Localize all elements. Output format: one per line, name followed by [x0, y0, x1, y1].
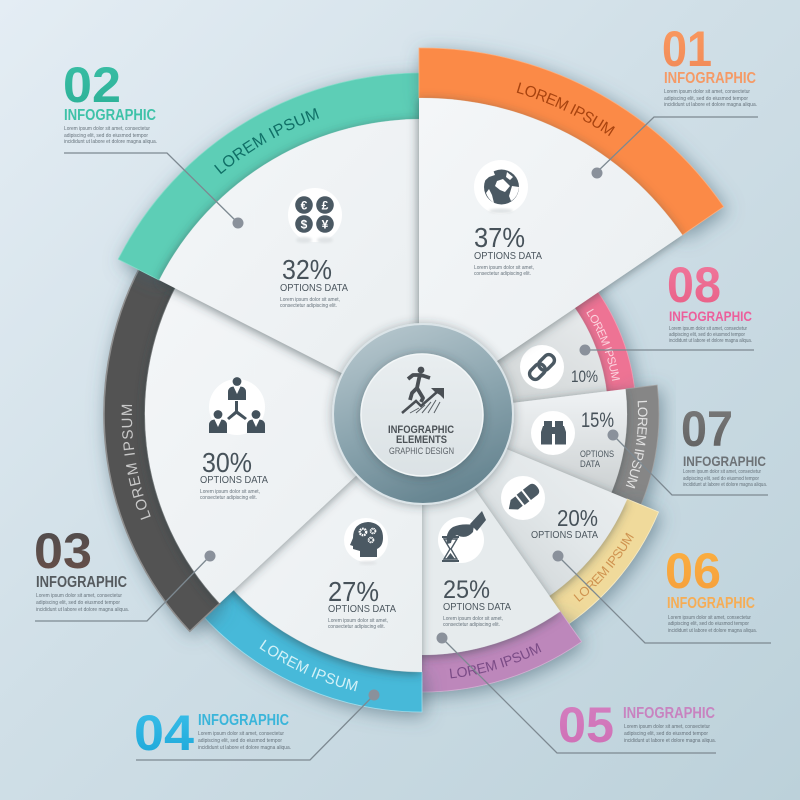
caption options data: OPTIONS — [580, 449, 614, 460]
label 04: incididunt ut labore et dolore magna aliqua. — [198, 745, 291, 751]
label 02: Lorem ipsum dolor sit amet, consectetur — [64, 126, 150, 132]
label 02: incididunt ut labore et dolore magna aliqua. — [64, 139, 157, 145]
icon: binoculars — [531, 411, 575, 455]
panel: segment 05 — [422, 486, 590, 706]
label 03: adipiscing elit, sed do eiusmod tempor — [36, 600, 120, 606]
caption options data: OPTIONS DATA — [280, 282, 348, 294]
band 03 — [104, 255, 220, 631]
label 07: INFOGRAPHIC — [683, 453, 766, 469]
caption options data: OPTIONS DATA — [443, 601, 511, 613]
band label 06: LOREM IPSUM — [574, 532, 634, 602]
hub ring — [333, 324, 513, 504]
label 06: adipiscing elit, sed do eiusmod tempor — [668, 621, 749, 627]
value 15%: 15% — [581, 409, 614, 432]
icon: hand and hourglass — [438, 511, 486, 563]
label 07: 07 — [681, 401, 733, 457]
label 05: INFOGRAPHIC — [623, 705, 715, 722]
body text — [280, 297, 340, 309]
band label 07: LOREM IPSUM — [626, 400, 648, 488]
body text: consectetur adipiscing elit. — [200, 495, 257, 501]
wedge 06 — [422, 414, 627, 606]
band 04 — [187, 573, 422, 712]
label 06: INFOGRAPHIC — [667, 595, 755, 612]
caption options data: OPTIONS DATA — [328, 603, 396, 615]
label 04: adipiscing elit, sed do eiusmod tempor — [198, 738, 282, 744]
label 08: INFOGRAPHIC — [669, 308, 752, 324]
value 30%: 30% — [202, 447, 252, 478]
caption options data: OPTIONS DATA — [200, 474, 268, 486]
band label 08: LOREM IPSUM — [586, 308, 620, 381]
label 08: Lorem ipsum dolor sit amet, consectetur — [669, 326, 747, 332]
body text — [200, 489, 260, 501]
icon: currency coins: £ — [322, 198, 329, 212]
label 08: adipiscing elit, sed do eiusmod tempor — [669, 332, 745, 338]
icon: head with gears — [344, 518, 388, 565]
body text — [474, 265, 534, 277]
panel: segment 03 — [96, 268, 361, 641]
value 10%: 10% — [571, 367, 598, 386]
label 06: Lorem ipsum dolor sit amet, consectetur — [668, 615, 751, 621]
band label 05: LOREM IPSUM — [450, 643, 542, 678]
body text: Lorem ipsum dolor sit amet, — [200, 489, 260, 495]
leader 03 — [35, 550, 216, 621]
label 01: Lorem ipsum dolor sit amet, consectetur — [664, 89, 750, 95]
hub title: ELEMENTS — [396, 434, 447, 446]
label 01: adipiscing elit, sed do eiusmod tempor — [664, 96, 748, 102]
band 07 — [603, 385, 659, 525]
icon: currency coins: € — [301, 198, 308, 212]
band 08 — [564, 276, 636, 408]
panel: segment 08 — [500, 288, 646, 402]
wedge 05 — [401, 414, 560, 655]
label 05 — [558, 697, 716, 753]
label 01 — [662, 21, 757, 108]
label 07 — [681, 401, 767, 488]
leader 01 — [592, 117, 758, 178]
leader 06 — [552, 550, 771, 643]
panel: segment 01 — [410, 42, 732, 367]
wedge 01 — [419, 98, 682, 414]
label 02 — [63, 57, 157, 145]
label 04: 04 — [134, 705, 194, 761]
icon: people network — [209, 377, 265, 435]
body text: consectetur adipiscing elit. — [474, 271, 531, 277]
value 37%: 37% — [474, 222, 525, 253]
wedge 08 — [422, 294, 608, 414]
body text: Lorem ipsum dolor sit amet, — [328, 618, 388, 624]
panel: segment 07 — [507, 380, 672, 510]
icon: currency coins — [288, 188, 342, 243]
label 02: 02 — [63, 57, 121, 113]
icon: link — [520, 345, 564, 389]
label 07: Lorem ipsum dolor sit amet, consectetur — [683, 469, 761, 475]
leader 04 — [136, 690, 380, 760]
label 04 — [134, 705, 291, 761]
value 20%: 20% — [557, 505, 598, 531]
caption options data: OPTIONS DATA — [531, 529, 598, 541]
icon: currency coins: $ — [301, 218, 308, 232]
band 05 — [398, 611, 582, 692]
band label 03: LOREM IPSUM — [122, 404, 151, 520]
icon: currency coins: ¥ — [322, 218, 329, 232]
body text: consectetur adipiscing elit. — [328, 624, 385, 630]
body text — [443, 616, 503, 628]
hub title: INFOGRAPHIC — [388, 424, 454, 436]
label 01: 01 — [662, 21, 712, 77]
caption options data — [580, 449, 614, 470]
panel: central hub — [333, 324, 513, 504]
band 01 — [419, 48, 724, 235]
body text: Lorem ipsum dolor sit amet, — [443, 616, 503, 622]
label 05: adipiscing elit, sed do eiusmod tempor — [624, 731, 708, 737]
label 02: INFOGRAPHIC — [64, 107, 156, 124]
label 03: 03 — [34, 523, 92, 579]
label 05: incididunt ut labore et dolore magna aliqua. — [624, 738, 716, 744]
leader 02 — [64, 153, 244, 228]
icon: globe — [474, 160, 528, 214]
value 27%: 27% — [328, 576, 379, 607]
leader 07 — [608, 430, 768, 495]
leader 08 — [580, 344, 754, 356]
label 06: 06 — [665, 543, 721, 599]
band label 02: LOREM IPSUM — [214, 108, 319, 174]
wedge 02 — [159, 119, 432, 414]
hub title — [388, 424, 454, 446]
label 01: INFOGRAPHIC — [664, 70, 756, 87]
wedge 04 — [219, 414, 422, 672]
label 03 — [34, 523, 129, 613]
label 04: INFOGRAPHIC — [198, 712, 289, 729]
band 02 — [118, 73, 434, 280]
body text — [328, 618, 388, 630]
body text: consectetur adipiscing elit. — [443, 622, 500, 628]
label 08: 08 — [667, 257, 721, 313]
body text: Lorem ipsum dolor sit amet, — [280, 297, 340, 303]
caption options data: DATA — [580, 459, 601, 470]
panel: segment 02 — [112, 66, 419, 381]
icon: pencil — [501, 476, 545, 520]
value 25%: 25% — [443, 576, 490, 604]
label 08 — [667, 257, 752, 344]
label 07: incididunt ut labore et dolore magna aliqua. — [683, 482, 767, 488]
label 05: 05 — [558, 697, 614, 753]
label 03: INFOGRAPHIC — [36, 574, 127, 591]
label 06: incididunt ut labore et dolore magna aliqua. — [668, 628, 757, 634]
label 03: incididunt ut labore et dolore magna aliqua. — [36, 607, 129, 613]
band label 01: LOREM IPSUM — [516, 82, 615, 136]
label 06 — [665, 543, 757, 634]
label 05: Lorem ipsum dolor sit amet, consectetur — [624, 724, 710, 730]
panel: segment 06 — [475, 446, 668, 635]
label 07: adipiscing elit, sed do eiusmod tempor — [683, 476, 759, 482]
band label 04: LOREM IPSUM — [260, 640, 358, 692]
label 02: adipiscing elit, sed do eiusmod tempor — [64, 133, 148, 139]
wedge 03 — [145, 276, 422, 603]
leader 05 — [436, 632, 716, 753]
label 03: Lorem ipsum dolor sit amet, consectetur — [36, 593, 122, 599]
caption options data: OPTIONS DATA — [474, 250, 542, 262]
panel: segment 04 — [198, 476, 436, 726]
hub subtitle: GRAPHIC DESIGN — [389, 446, 454, 456]
label 01: incididunt ut labore et dolore magna aliqua. — [664, 102, 757, 108]
icon: runner on rising arrow — [402, 367, 444, 413]
label 08: incididunt ut labore et dolore magna aliqua. — [669, 338, 752, 344]
body text: Lorem ipsum dolor sit amet, — [474, 265, 534, 271]
body text: consectetur adipiscing elit. — [280, 303, 337, 309]
band 06 — [533, 499, 658, 636]
label 04: Lorem ipsum dolor sit amet, consectetur — [198, 731, 284, 737]
value 32%: 32% — [282, 254, 332, 285]
hub disc — [361, 354, 483, 476]
wedge 07 — [422, 389, 627, 510]
